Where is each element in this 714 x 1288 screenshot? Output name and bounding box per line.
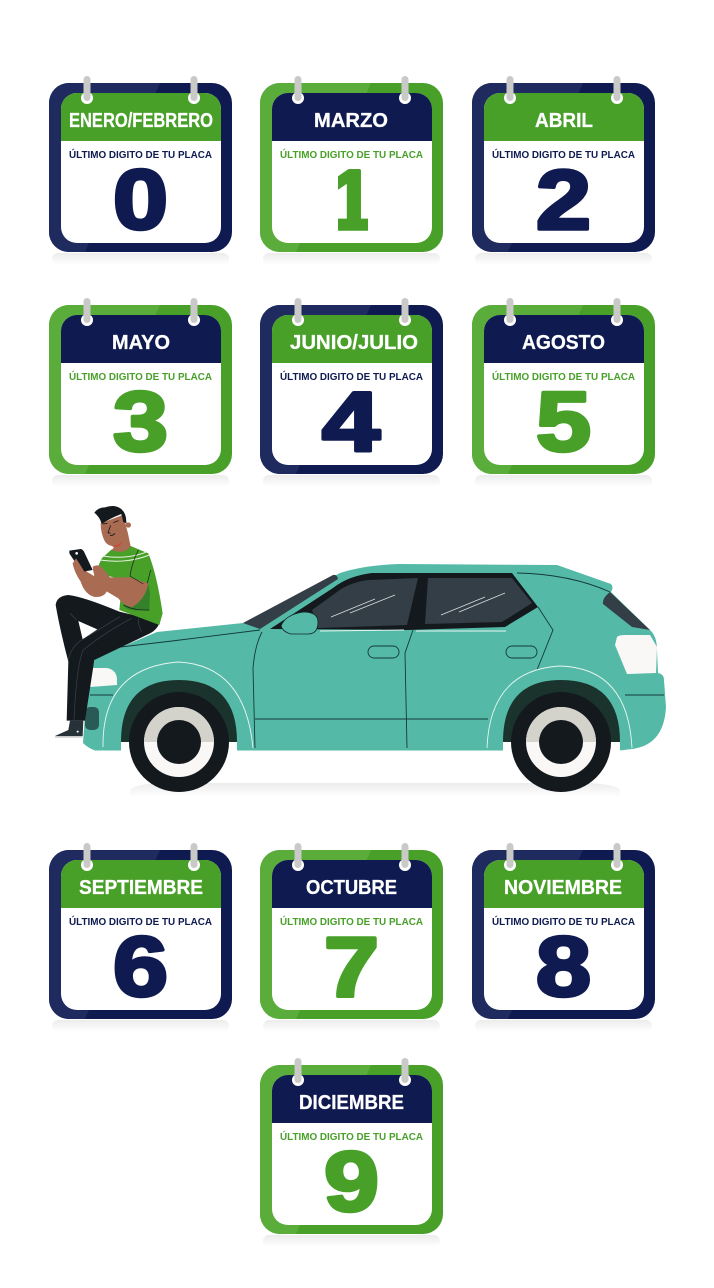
illustration: car with person sitting on the hood (55, 506, 666, 797)
calendar: agosto digit 5: AGOSTO (522, 331, 605, 354)
shirt shadow (123, 583, 150, 611)
calendar: agosto digit 5 (472, 298, 655, 487)
calendar: junio/julio digit 4 (260, 298, 443, 487)
calendar: noviembre digit 8: NOVIEMBRE (504, 876, 622, 899)
ear (126, 522, 131, 528)
calendar: mayo digit 3: ÚLTIMO DIGITO DE TU PLACA (69, 370, 212, 383)
calendar: agosto digit 5: 5 (536, 374, 591, 468)
rear wheel arch (503, 680, 620, 742)
car ground shadow (130, 783, 620, 797)
rear quarter window (603, 592, 650, 630)
calendar: diciembre digit 9: 9 (324, 1134, 379, 1228)
calendar: junio/julio digit 4: 4 (322, 375, 380, 469)
calendar: octubre digit 7: 7 (324, 920, 379, 1014)
calendar: mayo digit 3: MAYO (112, 331, 170, 354)
pants crease lines (68, 613, 142, 720)
body lines (90, 573, 664, 748)
calendar: mayo digit 3 (49, 298, 232, 487)
calendar: octubre digit 7: OCTUBRE (306, 876, 397, 899)
windshield strip (243, 575, 338, 629)
calendar: marzo digit 1: MARZO (314, 109, 388, 132)
front wheel (121, 692, 237, 792)
calendar: noviembre digit 8: 8 (536, 920, 591, 1014)
rear window glass (425, 578, 532, 624)
calendar: septiembre digit 6: 6 (113, 920, 168, 1014)
calendar: septiembre digit 6: ÚLTIMO DIGITO DE TU PLACA (69, 915, 212, 928)
front window glass (312, 578, 418, 628)
calendar: abril digit 2: ÚLTIMO DIGITO DE TU PLACA (492, 148, 635, 161)
person upper body (69, 506, 163, 625)
calendar: enero/febrero digit 0: 0 (113, 152, 168, 246)
calendar: diciembre digit 9: DICIEMBRE (299, 1091, 404, 1114)
calendar: marzo digit 1 (260, 76, 443, 265)
calendar: septiembre digit 6: SEPTIEMBRE (79, 876, 203, 899)
calendar: abril digit 2: ABRIL (535, 109, 593, 132)
grille (85, 707, 99, 730)
calendar: enero/febrero digit 0: ENERO/FEBRERO (69, 109, 213, 132)
calendar: noviembre digit 8: ÚLTIMO DIGITO DE TU PLACA (492, 915, 635, 928)
headlight (90, 668, 117, 687)
neck and face (101, 515, 131, 552)
sleeve lines (123, 550, 151, 610)
window reflections (331, 593, 505, 617)
hand on phone (73, 558, 84, 582)
taillight (615, 635, 657, 674)
pointing arm (93, 565, 148, 607)
calendar: noviembre digit 8 (472, 843, 655, 1032)
front wheel arch (121, 680, 237, 742)
phone (69, 549, 93, 572)
calendar: abril digit 2: 2 (536, 153, 591, 247)
calendar: enero/febrero digit 0: ÚLTIMO DIGITO DE TU PLACA (69, 148, 212, 161)
calendar: abril digit 2 (472, 76, 655, 265)
mirror (281, 612, 318, 634)
calendar: agosto digit 5: ÚLTIMO DIGITO DE TU PLACA (492, 370, 635, 383)
white highlights (103, 630, 632, 748)
phone-holding arm (73, 560, 107, 597)
pants (56, 595, 159, 721)
calendar: septiembre digit 6 (49, 843, 232, 1032)
shirt stripes (100, 552, 149, 561)
calendar: junio/julio digit 4: JUNIO/JULIO (290, 331, 418, 354)
gap between legs (78, 621, 97, 639)
chin shadow (112, 541, 122, 547)
calendar: octubre digit 7 (260, 843, 443, 1032)
calendar: enero/febrero digit 0 (49, 76, 232, 265)
person legs (55, 595, 159, 738)
calendar: mayo digit 3: 3 (113, 374, 168, 468)
calendar: diciembre digit 9: ÚLTIMO DIGITO DE TU PLACA (280, 1130, 423, 1143)
shirt (94, 546, 163, 625)
window frame (270, 573, 538, 630)
rear wheel (503, 692, 620, 792)
hair (94, 506, 126, 524)
car body (83, 564, 666, 750)
calendar: octubre digit 7: ÚLTIMO DIGITO DE TU PLACA (280, 915, 423, 928)
calendar: diciembre digit 9 (260, 1058, 443, 1247)
calendar: junio/julio digit 4: ÚLTIMO DIGITO DE TU PLACA (280, 370, 423, 383)
calendar: marzo digit 1: 1 (330, 153, 374, 247)
calendar: marzo digit 1: ÚLTIMO DIGITO DE TU PLACA (280, 148, 423, 161)
face lines (103, 521, 119, 535)
shoe (55, 721, 83, 736)
